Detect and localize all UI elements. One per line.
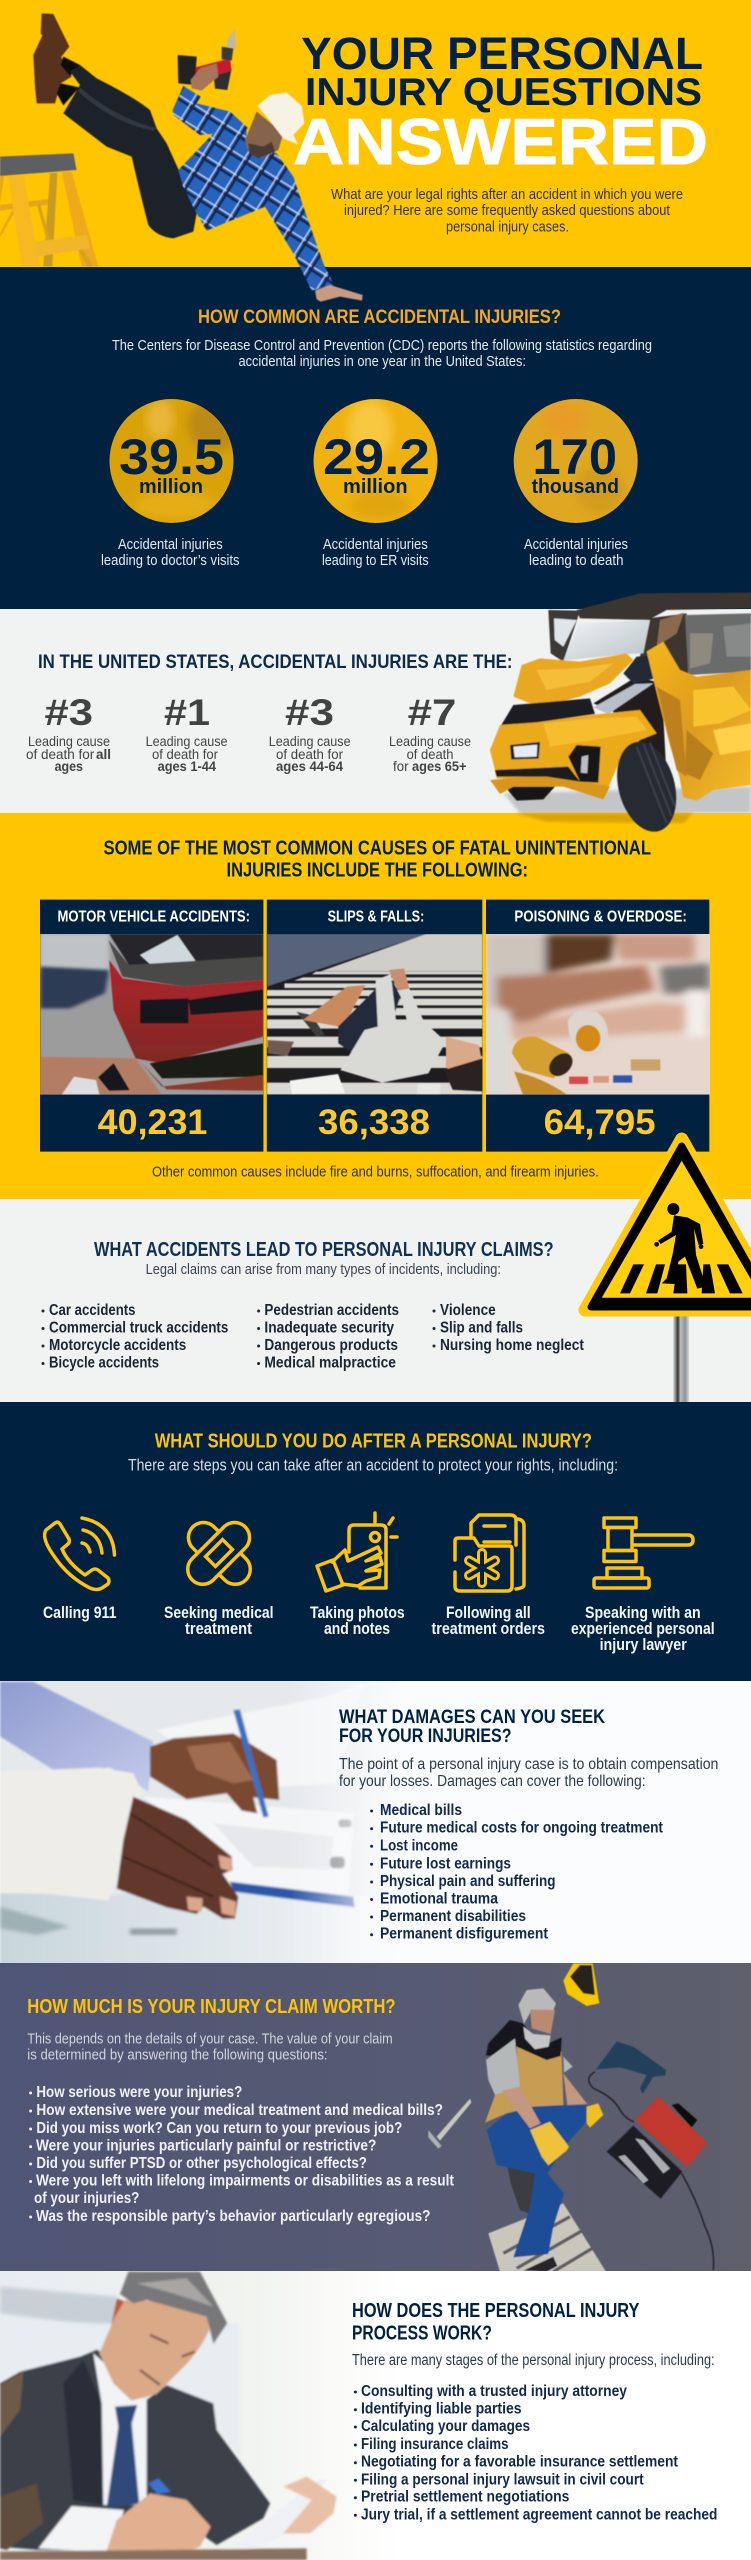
list: process stages: Filing insurance claims (361, 2436, 509, 2453)
heading: fatal causes: SOME OF THE MOST COMMON CAUSES OF FATAL UNINTENTIONAL (104, 838, 651, 860)
rank: ages 1-44: of death for (152, 746, 218, 762)
text: steps intro: There are steps you can take after an accident to protect your rights, including: (128, 1457, 618, 1475)
text: claim worth intro: is determined by answering the following questions: (27, 2047, 328, 2064)
heading: leading cause: IN THE UNITED STATES, ACCIDENTAL INJURIES ARE THE: (38, 652, 512, 673)
tie (107, 2405, 139, 2507)
sleeve (486, 2038, 520, 2095)
section background: damages white (0, 1681, 751, 1963)
heading: how common: HOW COMMON ARE ACCIDENTAL INJURIES? (198, 306, 561, 328)
laptop (159, 1696, 336, 1786)
icon: phone (45, 1518, 114, 1590)
heading: what damages: WHAT DAMAGES CAN YOU SEEK (339, 1706, 605, 1728)
list: claim questions: Did you suffer PTSD or other psychological effects? (36, 2155, 367, 2172)
list: claim questions (29, 2084, 454, 2225)
text: legal claims intro: Legal claims can arise from many types of incidents, including: (146, 1261, 501, 1278)
hair (518, 1988, 556, 2024)
face (530, 2009, 555, 2034)
list: damages: Permanent disabilities (380, 1908, 526, 1925)
photo: person fallen on stairs (267, 934, 482, 1095)
window background (0, 2287, 117, 2328)
list: accident types column 1: Commercial truck accidents (49, 1320, 228, 1337)
list: accident types column 2: Pedestrian accidents (264, 1302, 399, 1319)
panel: poisoning and overdose: POISONING & OVERDOSE: (514, 908, 687, 926)
list: accident types column 2 (257, 1302, 399, 1372)
paper (187, 2479, 327, 2556)
stat circle: doctor visits: million (139, 476, 203, 498)
arms (502, 2073, 587, 2128)
front tire (616, 741, 677, 832)
rank: ages 65+ (389, 692, 471, 774)
paper hand (283, 2477, 337, 2533)
boot (508, 2168, 535, 2213)
icon: gavel (594, 1518, 693, 1588)
list: damages: Future lost earnings (380, 1855, 511, 1872)
jeans (63, 65, 197, 238)
section background: navy statistics (0, 267, 751, 609)
stat circle: ER visits (314, 399, 438, 523)
shirt arm raised (173, 86, 248, 135)
desk (0, 2548, 307, 2560)
front bumper (489, 709, 658, 788)
left wheel (505, 787, 555, 801)
toolbox (635, 2097, 707, 2167)
photo: spilled pill bottles (486, 934, 710, 1095)
raised hand (191, 63, 218, 91)
clipboard (143, 1797, 353, 1895)
list: accident types column 3 (432, 1302, 584, 1354)
illustration: ladder (0, 153, 98, 267)
list: damages (370, 1802, 663, 1943)
roof (577, 593, 751, 620)
rank: all ages: #3 (44, 692, 93, 733)
rank: all ages: ages (55, 758, 83, 774)
rank: ages 65+: ages 65+ (412, 758, 466, 774)
list: damages: Emotional trauma (380, 1890, 498, 1908)
list: accident types column 2: Inadequate security (264, 1320, 394, 1337)
list: accident types column 3: Slip and falls (440, 1320, 523, 1337)
section background: common causes yellow (0, 813, 751, 1199)
section background: hero yellow (0, 0, 751, 267)
stat captions: Accidental injuries (524, 536, 628, 553)
pen (148, 2478, 171, 2494)
list: process stages: Consulting with a trusted injury attorney (361, 2383, 627, 2400)
stat captions: Accidental injuries (118, 536, 223, 553)
list: accident types column 1: Bicycle accidents (49, 1355, 159, 1372)
ground shadow (503, 787, 751, 813)
socks (57, 57, 80, 105)
heading: process: HOW DOES THE PERSONAL INJURY (352, 2300, 640, 2322)
list: claim questions: of your injuries? (34, 2190, 139, 2207)
panel: slips and falls: 36,338 (318, 1103, 430, 1142)
stat captions: Accidental injuries (323, 536, 428, 553)
rank: ages 1-44: #1 (164, 692, 210, 733)
rank: all ages: Leading cause (28, 733, 110, 749)
door crumple (647, 642, 751, 801)
rank: ages 44-64: #3 (285, 692, 334, 733)
list: damages: Lost income (380, 1837, 458, 1854)
list: claim questions: Were your injuries particularly painful or restrictive? (36, 2138, 376, 2155)
cast (0, 1768, 143, 1901)
resting hand (117, 1797, 238, 1919)
suit (0, 2349, 270, 2550)
pillar (657, 613, 684, 647)
illustration: falling worker (33, 13, 363, 302)
engine dark (593, 677, 667, 780)
step label: speaking with a lawyer: Speaking with an (585, 1603, 701, 1622)
list: accident types column 1 (42, 1302, 228, 1372)
sign triangle (585, 1139, 751, 1310)
shirt body and arm (178, 128, 334, 291)
heading: claim worth: HOW MUCH IS YOUR INJURY CLAIM WORTH? (27, 1996, 396, 2018)
lower lip (490, 775, 610, 799)
rank: ages 1-44: ages 1-44 (158, 758, 216, 774)
step label: speaking with a lawyer: experienced personal (571, 1619, 715, 1638)
list: claim questions: How serious were your injuries? (36, 2084, 242, 2101)
panel: slips and falls: SLIPS & FALLS: (328, 908, 424, 926)
gloves (530, 2122, 569, 2165)
panel: motor vehicle accidents (40, 900, 263, 1152)
hard hat (563, 1963, 599, 2006)
jeans (487, 2105, 587, 2257)
stat circle: doctor visits (110, 399, 243, 523)
drill (213, 68, 232, 90)
step label: speaking with a lawyer: injury lawyer (600, 1635, 687, 1654)
shirt (93, 2353, 147, 2505)
rank: ages 65+: for (393, 758, 409, 774)
stat circle: deaths (514, 399, 638, 523)
hood (513, 653, 633, 707)
writing hand (107, 2493, 211, 2554)
step label: seeking medical treatment (164, 1603, 274, 1638)
text: CDC statement (112, 337, 652, 370)
list: claim questions: Was the responsible party’s behavior particularly egregious? (36, 2208, 430, 2225)
list: process stages: Pretrial settlement negotiations (361, 2489, 569, 2506)
icon: crossed bandages (182, 1516, 256, 1590)
title: ANSWERED (293, 105, 708, 178)
stat captions: leading to death (529, 552, 624, 569)
photo: lawyer reviewing documents (0, 2271, 400, 2560)
stat circle: doctor visits: 39.5 (119, 429, 224, 485)
icon: pedestrian crossing sign (585, 1139, 751, 1402)
rank: all ages: all (96, 746, 111, 762)
panel: motor vehicle accidents: MOTOR VEHICLE ACCIDENTS: (58, 908, 250, 926)
side window (685, 613, 751, 675)
list: process stages: Filing a personal injury lawsuit in civil court (361, 2471, 644, 2488)
illustration: wrecked yellow car (490, 593, 751, 838)
heading: what damages (339, 1706, 605, 1747)
intro text: personal injury cases. (446, 218, 569, 236)
step label: taking photos and notes (310, 1603, 405, 1638)
section background: claim worth slate (0, 1963, 751, 2271)
step label: following treatment orders: treatment orders (432, 1619, 545, 1638)
power drill (596, 2042, 666, 2094)
list: accident types column 3: Nursing home neglect (440, 1337, 584, 1354)
list: claim questions: Were you left with lifelong impairments or disabilities as a result (36, 2172, 454, 2190)
heading: what damages: FOR YOUR INJURIES? (339, 1725, 512, 1747)
icon: hand holding phone camera (317, 1513, 397, 1591)
hammer (437, 2099, 471, 2141)
stat circle: deaths: thousand (532, 476, 619, 498)
list: damages: Permanent disfigurement (380, 1926, 548, 1943)
step label: seeking medical treatment: Seeking medical (164, 1603, 274, 1622)
stat captions (101, 536, 628, 569)
heading: what should you do: WHAT SHOULD YOU DO AFTER A PERSONAL INJURY? (155, 1431, 592, 1453)
beard (523, 2027, 551, 2049)
step label: speaking with a lawyer (571, 1603, 715, 1654)
illustration: injured worker on asphalt (428, 1963, 714, 2272)
ear (110, 2298, 129, 2335)
panel: poisoning and overdose (486, 900, 710, 1152)
helmet (257, 92, 304, 145)
title (293, 28, 708, 178)
stat captions: leading to doctor’s visits (101, 552, 240, 569)
list: process stages: Identifying liable parties (361, 2401, 522, 2418)
rank: ages 44-64 (269, 692, 351, 774)
head (245, 112, 283, 158)
list: accident types column 3: Violence (440, 1302, 496, 1319)
list: accident types column 1: Car accidents (49, 1302, 136, 1319)
text: claim worth intro: This depends on the details of your case. The value of your claim (27, 2031, 393, 2048)
text: CDC statement: The Centers for Disease Control and Prevention (CDC) reports the following statistics regarding (112, 337, 652, 354)
section background: steps navy (0, 1402, 751, 1681)
fog light (568, 745, 601, 783)
text: other causes note: Other common causes include fire and burns, suffocation, and firearm injuries. (152, 1164, 599, 1181)
rank: all ages (26, 692, 111, 774)
face (99, 2300, 209, 2401)
list: damages: Medical bills (380, 1802, 462, 1819)
heading: process: PROCESS WORK? (352, 2322, 492, 2344)
list: claim questions: Did you miss work? Can you return to your previous job? (36, 2120, 402, 2137)
text: damages intro: for your losses. Damages can cover the following: (339, 1773, 646, 1790)
list: accident types column 2: Medical malpractice (264, 1355, 396, 1372)
panel: slips and falls (267, 900, 482, 1152)
heading: what accidents: WHAT ACCIDENTS LEAD TO PERSONAL INJURY CLAIMS? (94, 1239, 554, 1261)
grille dark (501, 698, 595, 726)
photo: crashed red truck (40, 934, 263, 1095)
list: damages: Future medical costs for ongoing treatment (380, 1820, 663, 1837)
list: process stages: Calculating your damages (361, 2418, 530, 2435)
rank: ages 65+: Leading cause (389, 733, 471, 749)
step label: following treatment orders (432, 1603, 545, 1638)
rank: ages 65+: of death (407, 746, 454, 762)
panel: poisoning and overdose: 64,795 (544, 1103, 656, 1142)
list: process stages: Negotiating for a favorable insurance settlement (361, 2454, 678, 2471)
text: damages intro (339, 1756, 718, 1790)
lower grille (495, 767, 580, 782)
title: YOUR PERSONAL (301, 28, 703, 79)
step label: following treatment orders: Following all (446, 1603, 531, 1622)
photo: injured hand in cast signing papers (0, 1681, 358, 1963)
hair (120, 2272, 227, 2344)
license plate (510, 742, 540, 759)
list: accident types column 1: Motorcycle accidents (49, 1337, 186, 1354)
ramp (488, 2203, 606, 2272)
intro text (331, 186, 683, 236)
rank: ages 1-44 (146, 692, 228, 774)
pill bottle upright (568, 1011, 608, 1056)
heading: process (352, 2300, 640, 2344)
step label: seeking medical treatment: treatment (185, 1619, 252, 1638)
rank: all ages: of death for (26, 746, 95, 762)
stat circle: ER visits: million (343, 476, 408, 498)
hood (486, 2020, 562, 2060)
rank: ages 1-44: Leading cause (146, 733, 228, 749)
intro text: injured? Here are some frequently asked questions about (344, 202, 671, 219)
windshield (563, 620, 650, 661)
rank: ages 44-64: of death for (276, 746, 343, 762)
icon: medical documents (455, 1515, 524, 1591)
step label: calling 911: Calling 911 (43, 1603, 116, 1622)
rank: ages 44-64: Leading cause (269, 733, 351, 749)
text: claim worth intro (27, 2031, 393, 2064)
vest (485, 2047, 563, 2123)
step label: taking photos and notes: and notes (324, 1619, 390, 1638)
list: damages: Physical pain and suffering (380, 1873, 556, 1890)
step label: taking photos and notes: Taking photos (310, 1603, 405, 1622)
section background: process white (0, 2271, 751, 2560)
cuff (38, 2506, 124, 2552)
rank: ages 44-64: ages 44-64 (276, 758, 343, 774)
boots (33, 13, 72, 103)
sleeve (0, 1682, 153, 1792)
list: process stages (354, 2383, 717, 2523)
section background: claims grey (0, 1199, 751, 1402)
stat circle: ER visits: 29.2 (323, 429, 430, 485)
list: claim questions: How extensive were your medical treatment and medical bills? (36, 2102, 443, 2119)
heading: fatal causes (104, 838, 651, 882)
rank: ages 65+: #7 (408, 692, 456, 733)
lower hand (315, 285, 363, 302)
stat captions: leading to ER visits (322, 552, 429, 569)
writing hand (150, 1733, 279, 1813)
heading: fatal causes: INJURIES INCLUDE THE FOLLOWING: (226, 860, 528, 882)
list: accident types column 2: Dangerous products (264, 1337, 398, 1354)
stat circle: deaths: 170 (532, 429, 617, 485)
sign pole (673, 1314, 689, 1402)
pill bottle on side (512, 1037, 569, 1078)
title: INJURY QUESTIONS (305, 71, 702, 114)
text: CDC statement: accidental injuries in one year in the United States: (238, 353, 526, 370)
intro text: What are your legal rights after an accident in which you were (331, 186, 683, 203)
section background: leading cause grey (0, 609, 751, 813)
panel: motor vehicle accidents: 40,231 (98, 1103, 207, 1142)
